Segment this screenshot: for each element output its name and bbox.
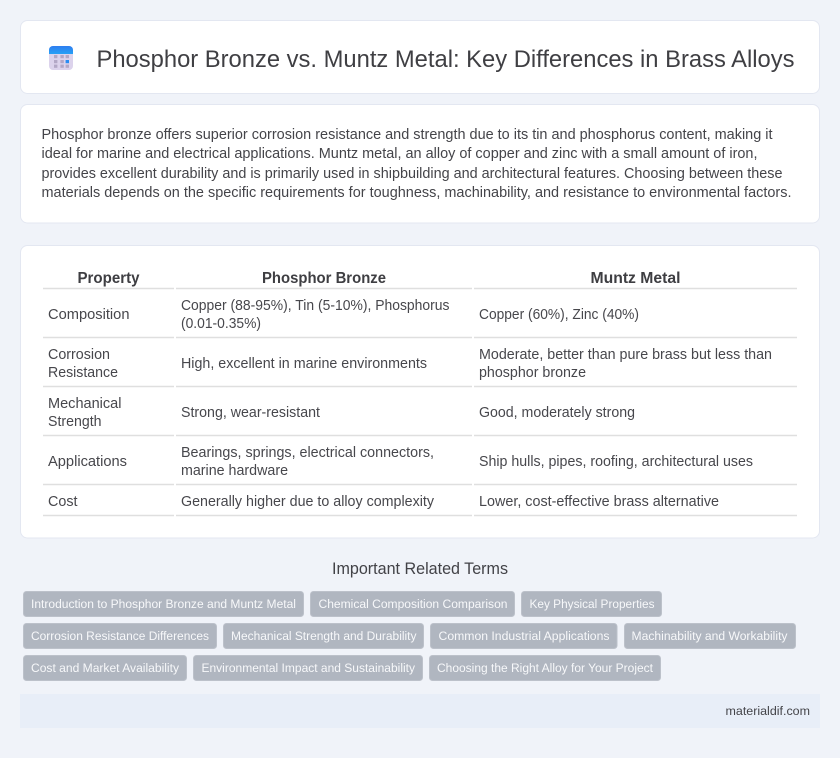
row: composition: (0.01-0.35%)	[181, 316, 261, 332]
row: mechanical strength: Mechanical	[48, 396, 122, 412]
row: corrosion resistance: Resistance	[48, 365, 118, 381]
row: corrosion resistance: Moderate, better than pure brass but less than	[479, 347, 772, 363]
table header row: Muntz Metal	[590, 270, 680, 287]
intro paragraph: materials depends on the specific requirements for toughness, machinability, and resistance to environmental factors.	[42, 185, 792, 201]
tag row 3	[24, 656, 660, 680]
row: composition: Copper (88-95%), Tin (5-10%), Phosphorus	[181, 298, 450, 314]
tag row 3: Cost and Market Availability	[31, 661, 180, 675]
row: mechanical strength: Good, moderately strong	[479, 405, 635, 421]
intro paragraph: ideal for marine and electrical applications. Muntz metal, an alloy of copper and zinc with a small amount of iron,	[42, 146, 758, 162]
panel: comparison table	[20, 246, 820, 538]
icon: calendar	[49, 46, 73, 70]
tag row 2: Machinability and Workability	[632, 629, 788, 643]
row: composition: Copper (60%), Zinc (40%)	[479, 307, 639, 323]
tag row 3: Environmental Impact and Sustainability	[202, 661, 416, 675]
row: mechanical strength: Strength	[48, 414, 102, 430]
tag row 2: Mechanical Strength and Durability	[231, 629, 417, 643]
row: cost: Generally higher due to alloy complexity	[181, 494, 435, 510]
intro paragraph: Phosphor bronze offers superior corrosion resistance and strength due to its tin and phosphorus content, making it	[42, 127, 772, 143]
footer bar	[20, 694, 820, 728]
row: applications: Ship hulls, pipes, roofing, architectural uses	[479, 454, 753, 470]
row: corrosion resistance: Corrosion	[48, 347, 110, 363]
row: mechanical strength	[48, 396, 635, 430]
tag row 1: Introduction to Phosphor Bronze and Muntz Metal	[31, 597, 296, 611]
tag row 1: Key Physical Properties	[530, 597, 654, 611]
header panel	[20, 20, 820, 94]
row: applications: Applications	[48, 454, 127, 470]
tag row 1	[24, 592, 662, 616]
tag row 2: Corrosion Resistance Differences	[31, 629, 209, 643]
row: corrosion resistance: phosphor bronze	[479, 365, 586, 381]
heading: important related terms: Important Related Terms	[332, 560, 508, 578]
row: cost	[48, 494, 719, 510]
table header row: Property	[78, 270, 140, 287]
row: mechanical strength: Strong, wear-resistant	[181, 405, 320, 421]
tag row 2: Common Industrial Applications	[438, 629, 610, 643]
row: corrosion resistance	[48, 347, 772, 381]
intro paragraph: provides excellent durability and is primarily used in shipbuilding and architectural features. Choosing between these	[42, 166, 782, 182]
tag row 2	[24, 624, 796, 648]
row: corrosion resistance: High, excellent in marine environments	[181, 356, 427, 372]
row: cost: Lower, cost-effective brass alternative	[479, 494, 719, 510]
table header row: Phosphor Bronze	[262, 270, 386, 287]
footer source text: materialdif.com	[726, 704, 810, 718]
row: composition: Composition	[48, 307, 130, 323]
related term tags	[24, 592, 796, 680]
row: composition	[48, 298, 639, 332]
table header row	[78, 270, 680, 287]
tag row 3: Choosing the Right Alloy for Your Project	[437, 661, 654, 675]
title: Phosphor Bronze vs. Muntz Metal: Key Differences in Brass Alloys	[96, 46, 794, 73]
row: applications: Bearings, springs, electrical connectors,	[181, 445, 434, 461]
panel: intro text	[20, 104, 820, 223]
row: applications	[48, 445, 753, 479]
tag row 1: Chemical Composition Comparison	[318, 597, 508, 611]
row: cost: Cost	[48, 494, 78, 510]
intro paragraph	[42, 127, 792, 201]
row: applications: marine hardware	[181, 463, 288, 479]
